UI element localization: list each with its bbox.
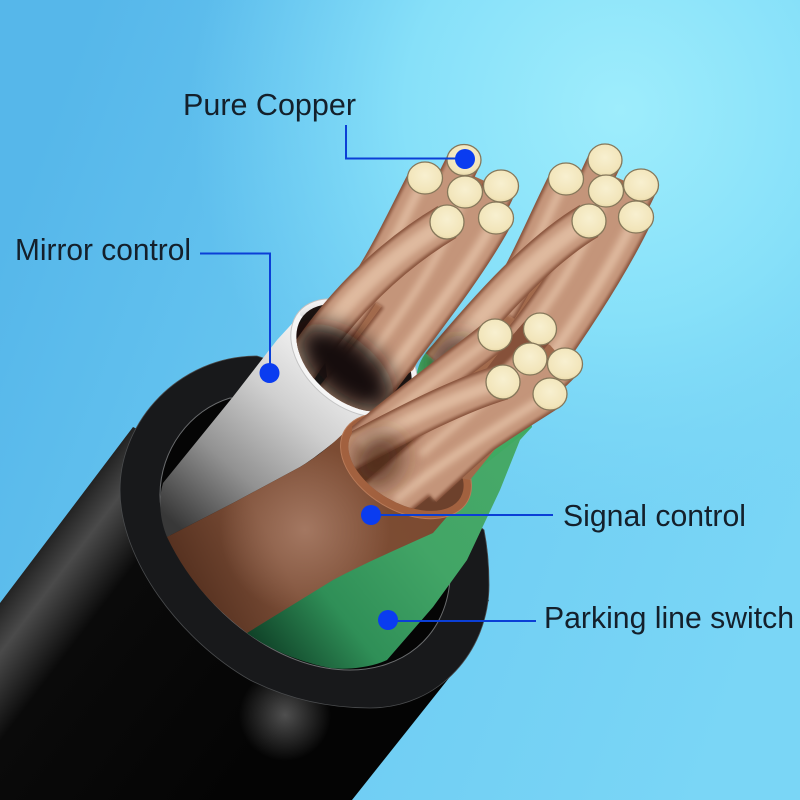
text: Signal control: Signal control bbox=[563, 500, 746, 533]
text: Mirror control: Mirror control bbox=[15, 234, 191, 267]
copper bundle: front bbox=[340, 313, 582, 520]
black jacket ring bbox=[120, 356, 489, 708]
text: Parking line switch: Parking line switch bbox=[544, 602, 794, 635]
marker: Pure Copper bbox=[455, 149, 475, 169]
copper bundle: right bbox=[421, 144, 658, 420]
brown wire bbox=[167, 392, 490, 633]
copper bundle: left bbox=[296, 144, 520, 412]
marker: Signal control bbox=[361, 505, 381, 525]
label: Signal control bbox=[361, 500, 746, 533]
text: Pure Copper: Pure Copper bbox=[183, 89, 356, 122]
label: Mirror control bbox=[15, 234, 280, 383]
left bundle strand ends bbox=[408, 144, 518, 239]
green wire bbox=[247, 333, 532, 669]
label: Parking line switch bbox=[378, 602, 794, 635]
right bundle strand ends bbox=[548, 144, 658, 238]
callout line: Pure Copper bbox=[346, 125, 465, 158]
callout line: Signal control bbox=[371, 514, 553, 516]
label: Pure Copper bbox=[183, 89, 475, 169]
cable illustration bbox=[0, 144, 658, 800]
callout line: Mirror control bbox=[200, 254, 270, 373]
marker: Mirror control bbox=[260, 363, 280, 383]
jacket hollow bbox=[160, 398, 450, 670]
white wire bbox=[160, 275, 440, 537]
marker: Parking line switch bbox=[378, 610, 398, 630]
callout line: Parking line switch bbox=[388, 620, 536, 622]
front bundle strand ends bbox=[478, 313, 582, 410]
black outer jacket bbox=[0, 427, 489, 800]
